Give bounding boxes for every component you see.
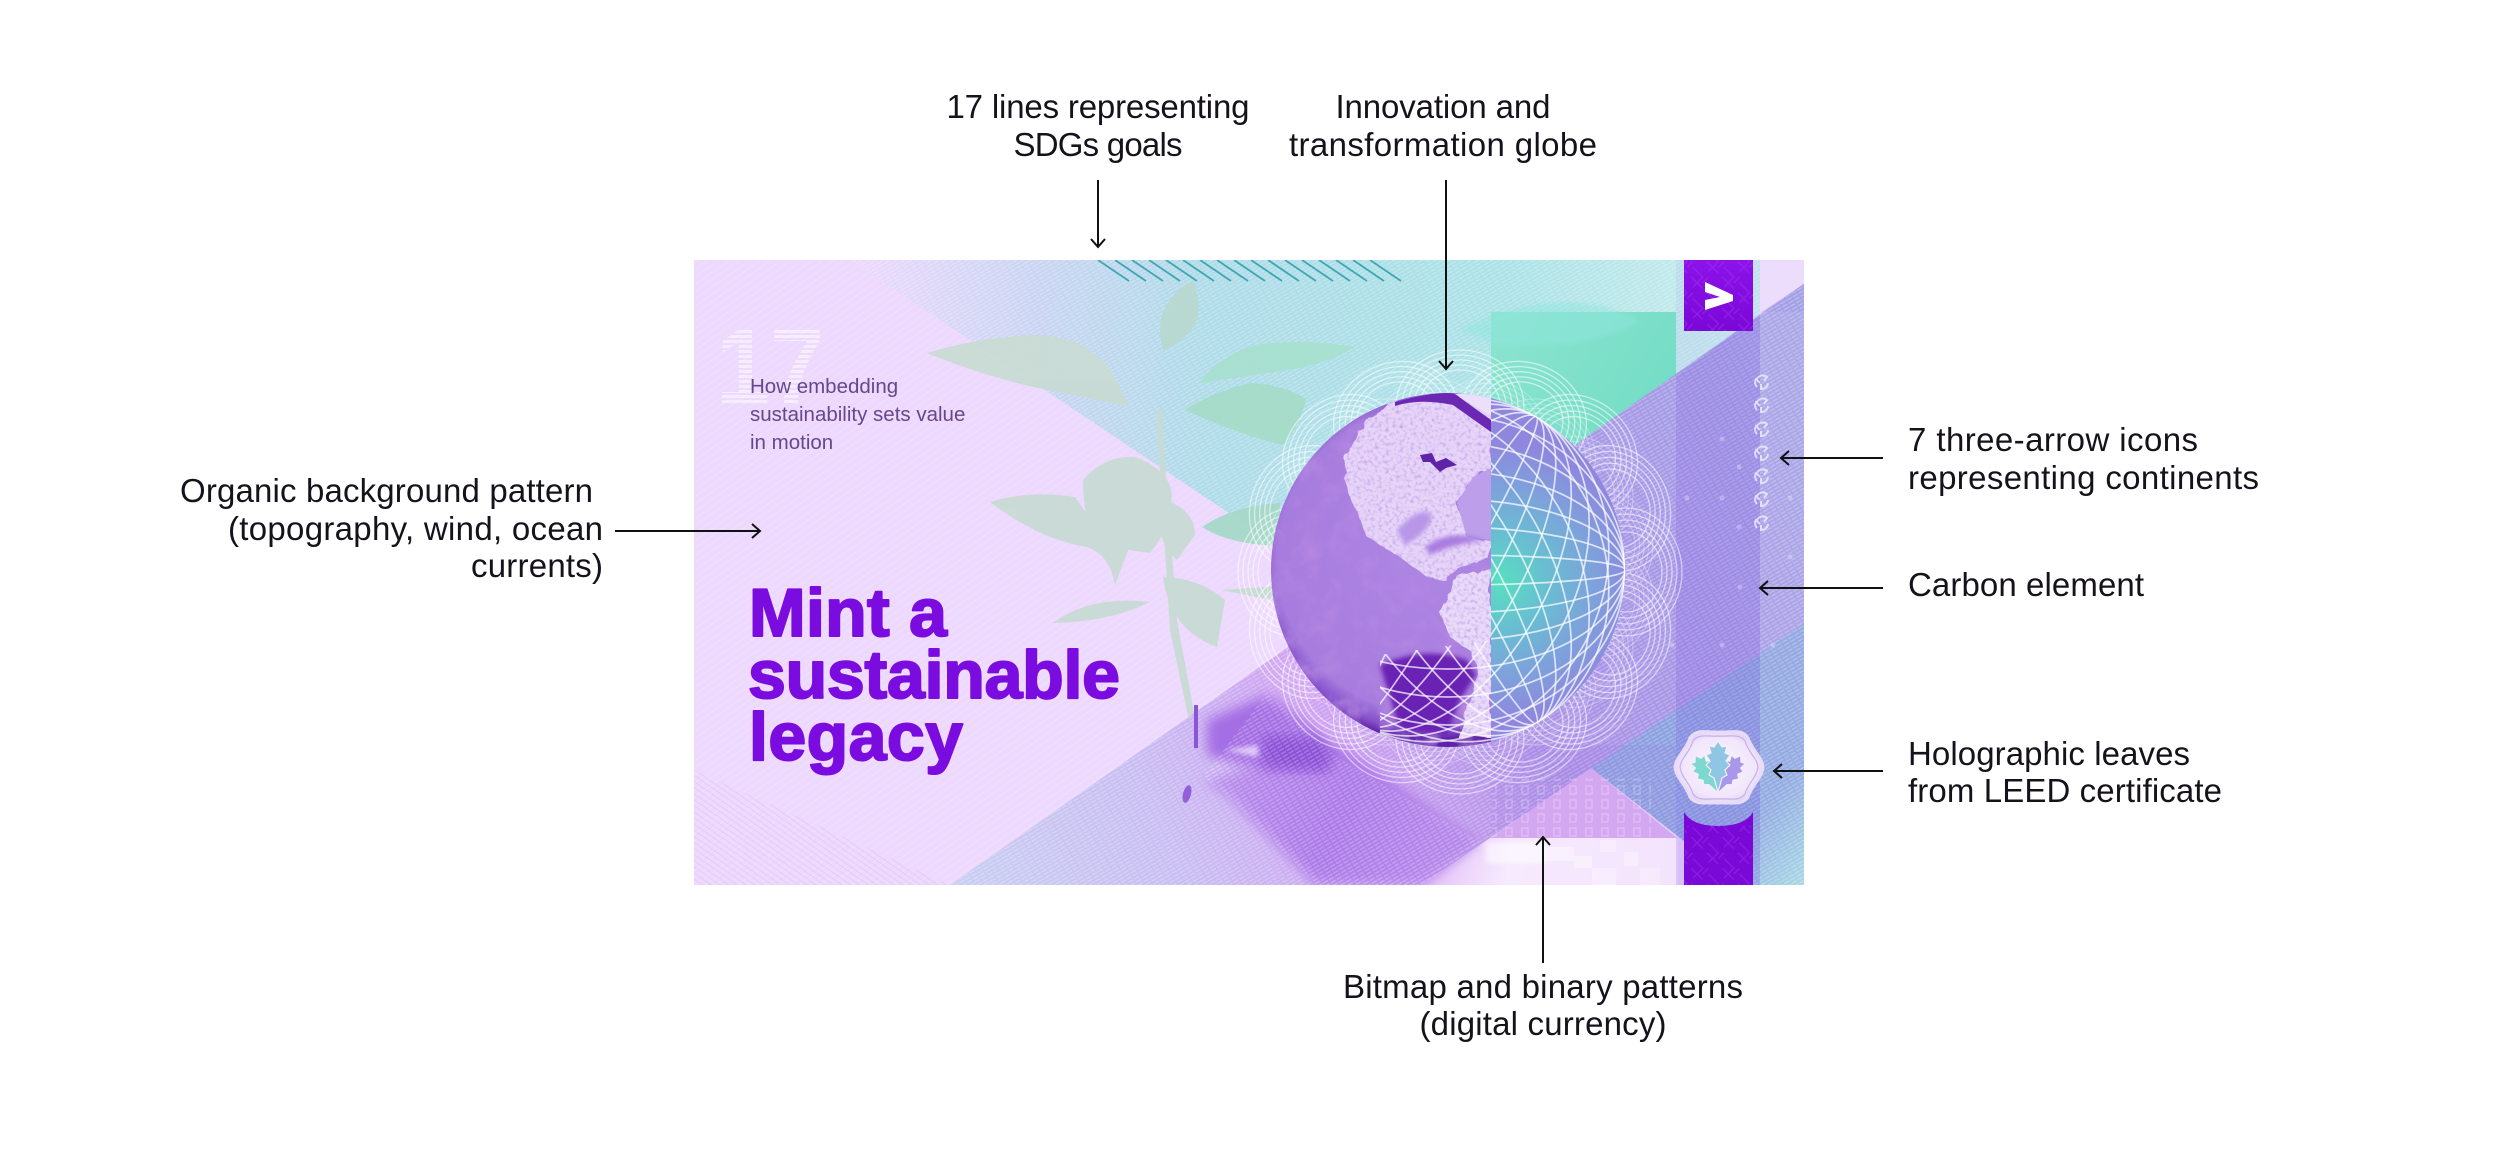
badge inner line bbox=[1680, 736, 1758, 799]
title: Mint a bbox=[749, 575, 948, 651]
hand silhouette bbox=[1207, 695, 1337, 775]
title: sustainable bbox=[748, 637, 1120, 713]
right strip tint bbox=[1760, 624, 1804, 828]
north america bbox=[1343, 392, 1491, 580]
gap between fingers bbox=[1225, 745, 1258, 757]
label: 17 lines: 17 lines representing bbox=[946, 88, 1250, 125]
card background bbox=[694, 260, 1804, 885]
top tag bbox=[1684, 260, 1753, 331]
arrow: three-arrow icons bbox=[1781, 451, 1883, 465]
light lower block bbox=[1421, 838, 1678, 885]
green rectangle bbox=[1491, 312, 1676, 446]
label: organic pattern: (topography, wind, ocean bbox=[228, 510, 603, 547]
tag pattern bbox=[1684, 260, 1753, 331]
subtitle: sustainability sets value bbox=[750, 403, 965, 426]
arrow: bitmap bbox=[1536, 837, 1550, 963]
ghost number 17: 17 bbox=[716, 305, 824, 426]
band dots bbox=[1670, 436, 1792, 648]
bitmap pattern bbox=[1486, 840, 1660, 885]
teal field texture bbox=[852, 260, 1760, 513]
forearm bbox=[1203, 745, 1480, 885]
continents bbox=[1343, 392, 1491, 738]
binary pattern bbox=[1491, 778, 1651, 840]
drop bbox=[1182, 785, 1192, 803]
texture bbox=[1203, 693, 1480, 885]
label: 17 lines: SDGs goals bbox=[1014, 126, 1182, 163]
leaf bbox=[1202, 503, 1280, 546]
label: innovation globe: Innovation and bbox=[1336, 88, 1550, 125]
label: carbon: Carbon element bbox=[1908, 566, 2144, 603]
right column tint upper bbox=[1676, 260, 1760, 377]
earth half ocean bbox=[1260, 385, 1491, 755]
leaf bbox=[927, 335, 1130, 407]
right leaf bbox=[1710, 751, 1749, 797]
right column tint lower bbox=[1676, 314, 1760, 885]
top right corner bbox=[1760, 260, 1805, 314]
left leaf bbox=[1687, 751, 1726, 797]
label: three-arrow icons: 7 three-arrow icons bbox=[1908, 421, 2198, 458]
tech half bbox=[1491, 385, 1631, 755]
arrow: globe bbox=[1439, 180, 1453, 369]
blue triangle bbox=[1591, 623, 1805, 885]
tag body bbox=[1684, 260, 1753, 331]
leaf bbox=[1083, 457, 1172, 553]
label: bitmap: Bitmap and binary patterns bbox=[1343, 968, 1743, 1005]
leaf bbox=[1185, 383, 1306, 445]
illustration card bbox=[694, 260, 1805, 885]
subtitle: How embedding bbox=[750, 375, 898, 398]
organic background pattern bbox=[694, 260, 1804, 885]
pink bitmap triangle bbox=[1491, 768, 1678, 839]
plant bbox=[927, 280, 1355, 745]
holographic leaves badge bbox=[1675, 732, 1763, 803]
7 three-arrow icons bbox=[1755, 375, 1768, 530]
leaf bbox=[1053, 601, 1150, 623]
tag pattern bbox=[1684, 826, 1753, 885]
palm shadow bbox=[1262, 735, 1332, 771]
label: organic pattern: Organic background pattern bbox=[180, 472, 593, 509]
guilloche rosette bbox=[1230, 342, 1690, 802]
faded leaves above green rectangle bbox=[1460, 302, 1640, 346]
plant stem bbox=[1156, 410, 1194, 718]
leaf bbox=[1160, 500, 1195, 560]
label: innovation globe: transformation globe bbox=[1289, 126, 1597, 163]
label: organic pattern: currents) bbox=[471, 547, 603, 584]
arrow: 17 lines bbox=[1091, 180, 1105, 247]
atlantic side bbox=[1457, 468, 1491, 540]
subtitle bbox=[750, 375, 965, 454]
greenland bbox=[1455, 392, 1491, 416]
leaf bbox=[1200, 342, 1355, 383]
label: leaves: Holographic leaves bbox=[1908, 735, 2190, 772]
label: leaves: from LEED certificate bbox=[1908, 772, 2222, 809]
bottom tag bbox=[1684, 812, 1753, 885]
outer lobes bbox=[1230, 342, 1690, 802]
title: legacy bbox=[749, 699, 963, 775]
hand bbox=[1181, 693, 1480, 885]
carbon diagonal band bbox=[950, 283, 1805, 885]
panel tint below globe bbox=[1491, 745, 1676, 838]
arrow: organic pattern bbox=[615, 524, 760, 538]
arrow: leaves bbox=[1774, 764, 1883, 778]
17 lines SDG hatch bbox=[1098, 260, 1401, 281]
lower left hatch triangle bbox=[694, 770, 950, 885]
gulf of mexico bbox=[1397, 512, 1432, 545]
south pacific dark bbox=[1380, 654, 1476, 735]
inner lobes bbox=[1257, 369, 1663, 775]
south america bbox=[1440, 566, 1491, 738]
label: three-arrow icons: representing continents bbox=[1908, 459, 2259, 496]
subtitle: in motion bbox=[750, 431, 833, 454]
badge shape bbox=[1675, 732, 1763, 803]
carbon band texture bbox=[950, 283, 1805, 885]
globe bbox=[1225, 339, 1671, 801]
label: bitmap: (digital currency) bbox=[1420, 1005, 1666, 1042]
centre leaf bbox=[1706, 741, 1730, 792]
leaf bbox=[1163, 577, 1225, 647]
teal upper field bbox=[876, 260, 1762, 514]
tag body bbox=[1684, 812, 1753, 885]
leaf bbox=[1160, 280, 1199, 350]
accenture chevron bbox=[1705, 282, 1733, 310]
great lakes bbox=[1420, 453, 1457, 472]
geodesic grid bbox=[1225, 339, 1671, 801]
stem in hand bbox=[1194, 705, 1198, 748]
leaf bbox=[990, 494, 1130, 585]
arrow: carbon bbox=[1760, 581, 1883, 595]
pink triangle top right bbox=[1760, 284, 1804, 314]
title bbox=[748, 575, 1120, 775]
arctic dark cap bbox=[1395, 393, 1491, 432]
leaf bbox=[1222, 586, 1274, 601]
blue triangle texture bbox=[1591, 623, 1805, 885]
caribbean bbox=[1425, 535, 1485, 555]
